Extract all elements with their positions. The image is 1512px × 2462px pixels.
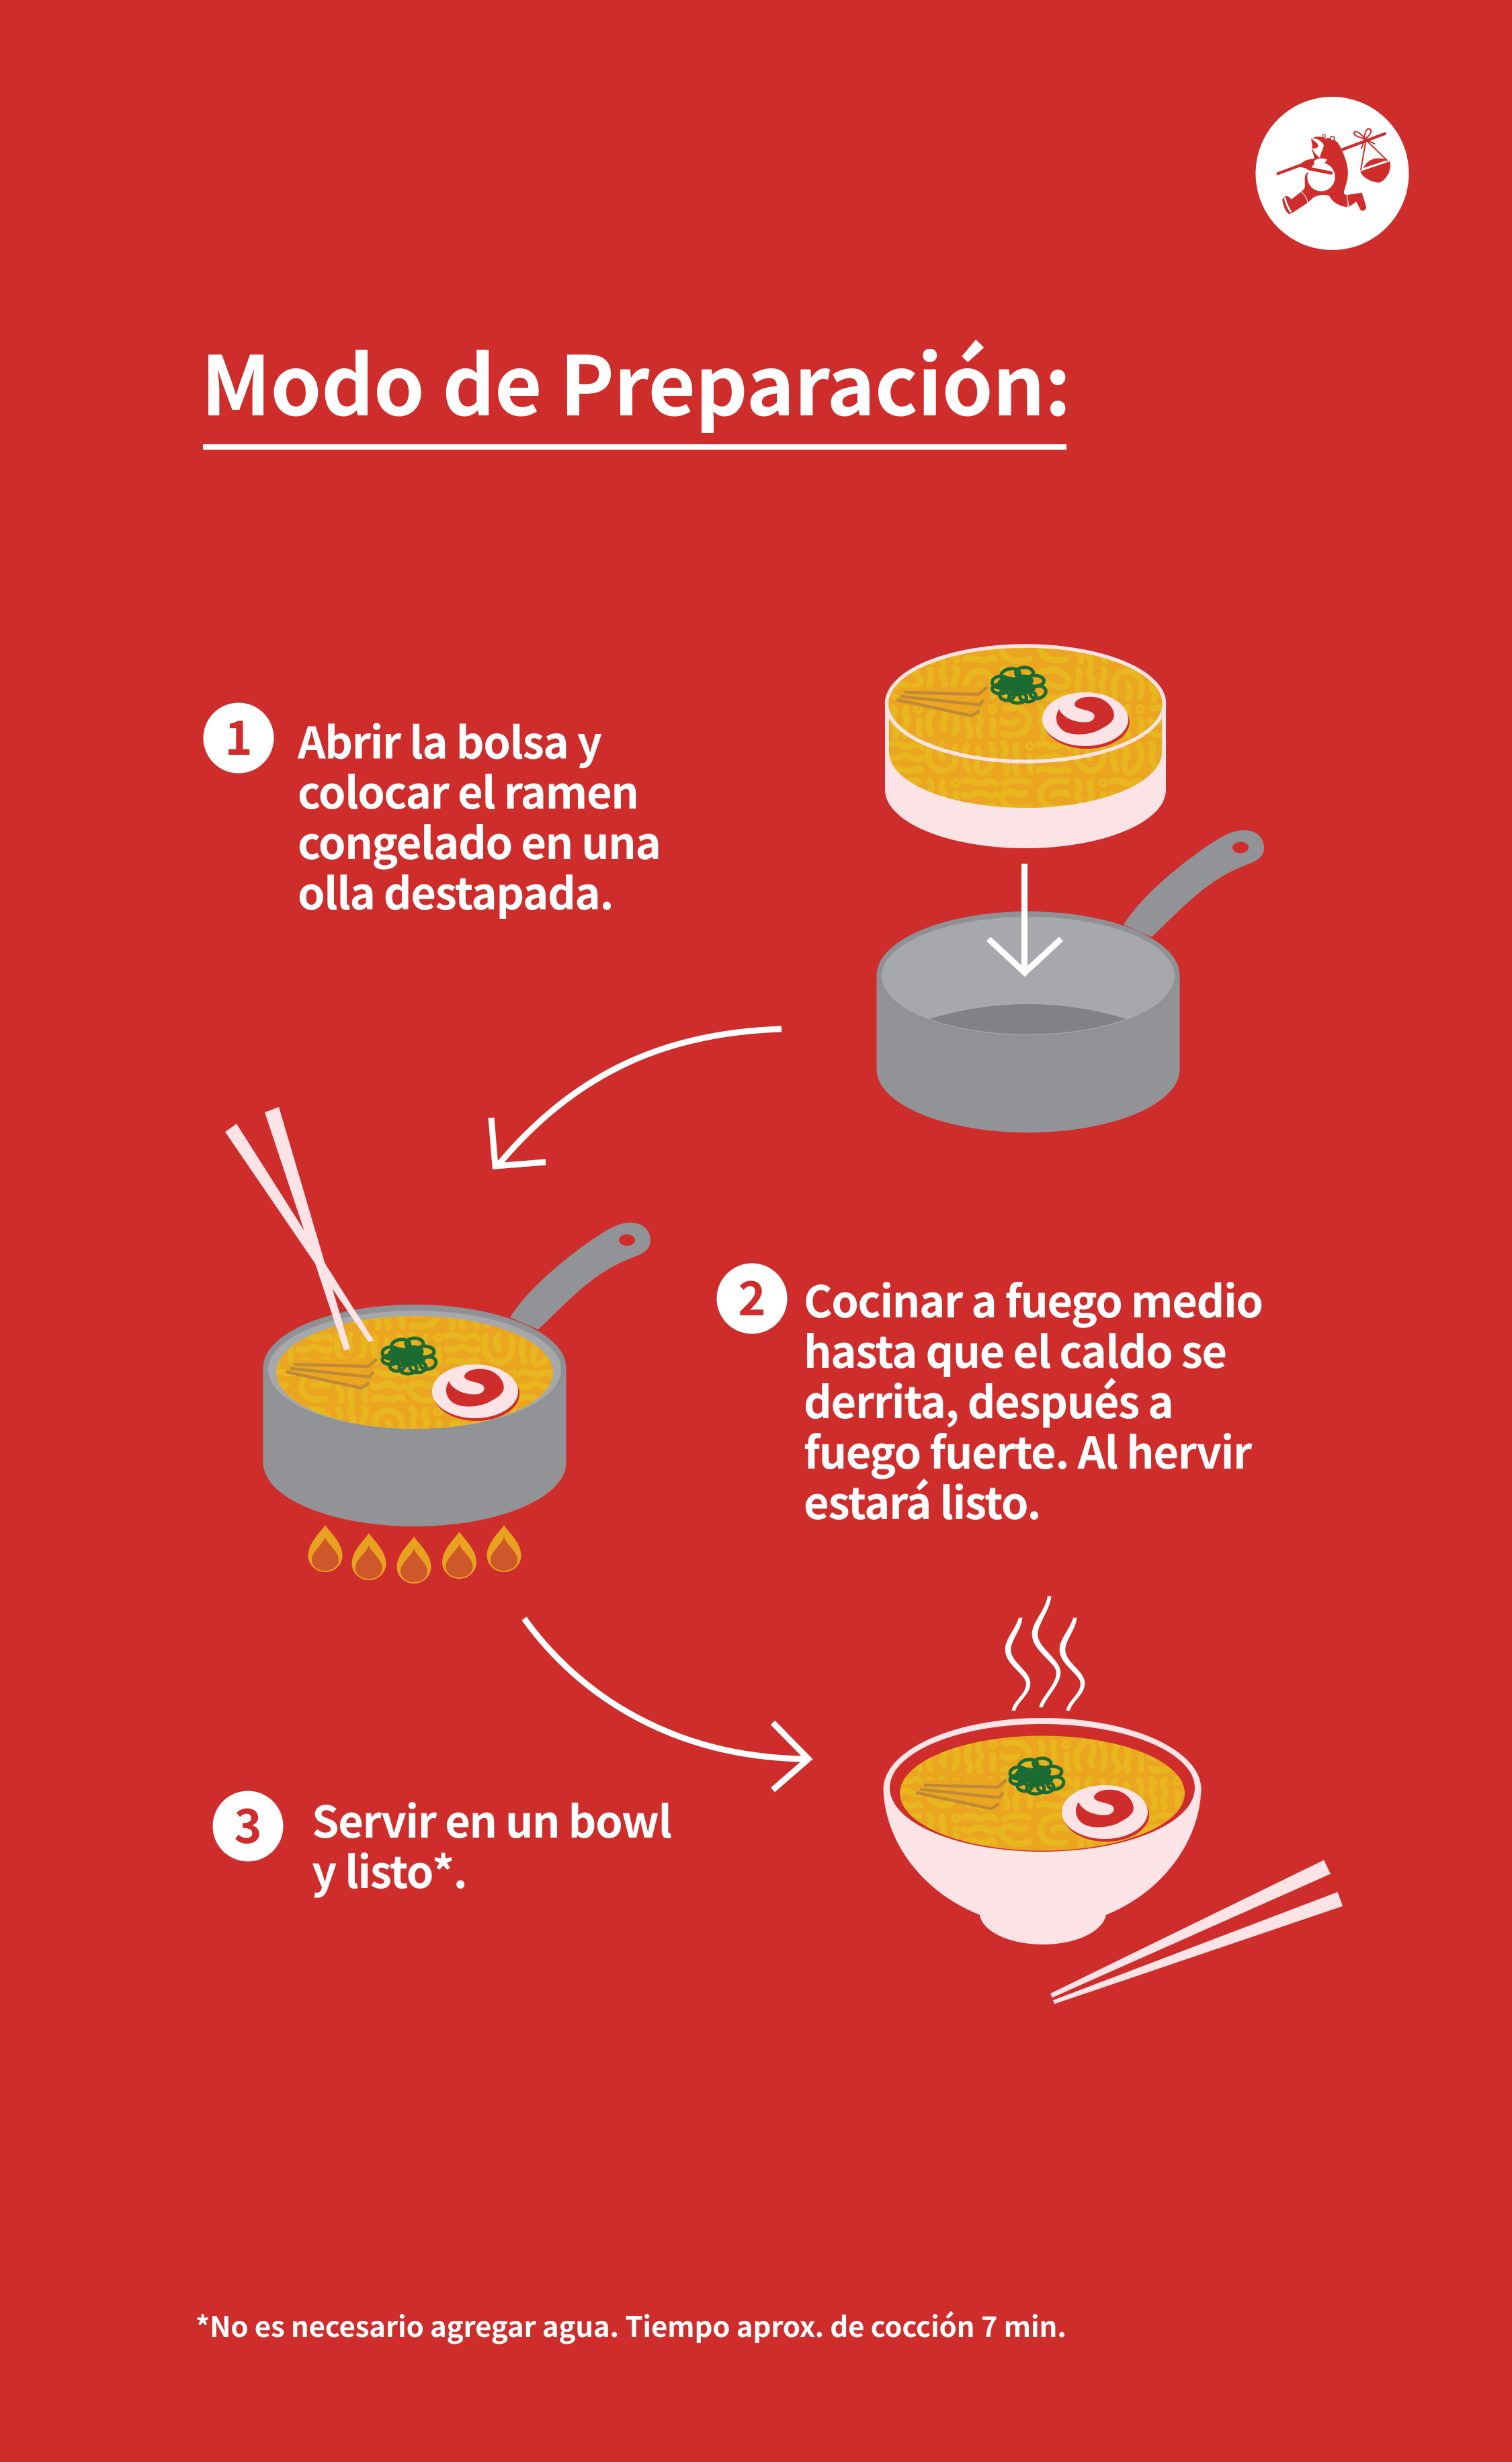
footnote: *No es necesario agregar agua. Tiempo aprox. de cocción 7 min. (196, 2305, 1066, 2346)
illustration: empty pan (876, 830, 1264, 1133)
step 2 text: hasta que el caldo se (804, 1317, 1226, 1381)
step 3 number badge (212, 1789, 284, 1862)
illustration: ramen bowl (883, 1718, 1202, 1944)
step 3 text: y listo*. (312, 1838, 466, 1901)
step 2 text: Cocinar a fuego medio (804, 1267, 1263, 1330)
step 2 text: derrita, después a (804, 1368, 1173, 1431)
step 3 text: Servir en un bowl (312, 1787, 672, 1850)
step 2 number badge: 2 (738, 1262, 766, 1329)
step 2 text: estará listo. (804, 1469, 1040, 1532)
step 3 number badge: 3 (234, 1789, 262, 1857)
illustration: frozen ramen puck (885, 646, 1166, 848)
step 2 number badge (716, 1262, 788, 1333)
illustration: pan on the stove with chopsticks (225, 1107, 650, 1526)
chopsticks beside bowl (1050, 1860, 1343, 2004)
step 2 text: fuego fuerte. Al hervir (804, 1418, 1253, 1481)
step 1 text (297, 708, 660, 922)
step 1 text: colocar el ramen (298, 758, 638, 821)
step 1 text: Abrir la bolsa y (297, 708, 602, 772)
arrow: step 1 to step 2 (491, 1029, 782, 1166)
chopsticks in pan (225, 1107, 374, 1350)
steam (1006, 1597, 1084, 1710)
step 1 text: congelado en una (298, 809, 660, 872)
arrow: step 2 to step 3 (524, 1618, 808, 1790)
arrow: into pan (989, 864, 1061, 975)
flames (308, 1525, 521, 1584)
title: Modo de Preparación: (201, 321, 1070, 440)
step 1 number badge: 1 (224, 701, 253, 769)
step 1 text: olla destapada. (298, 859, 613, 922)
step 2 text (804, 1267, 1263, 1532)
logo: running frog badge (1255, 97, 1409, 250)
step 1 number badge (203, 701, 274, 773)
step 3 text (312, 1787, 672, 1901)
